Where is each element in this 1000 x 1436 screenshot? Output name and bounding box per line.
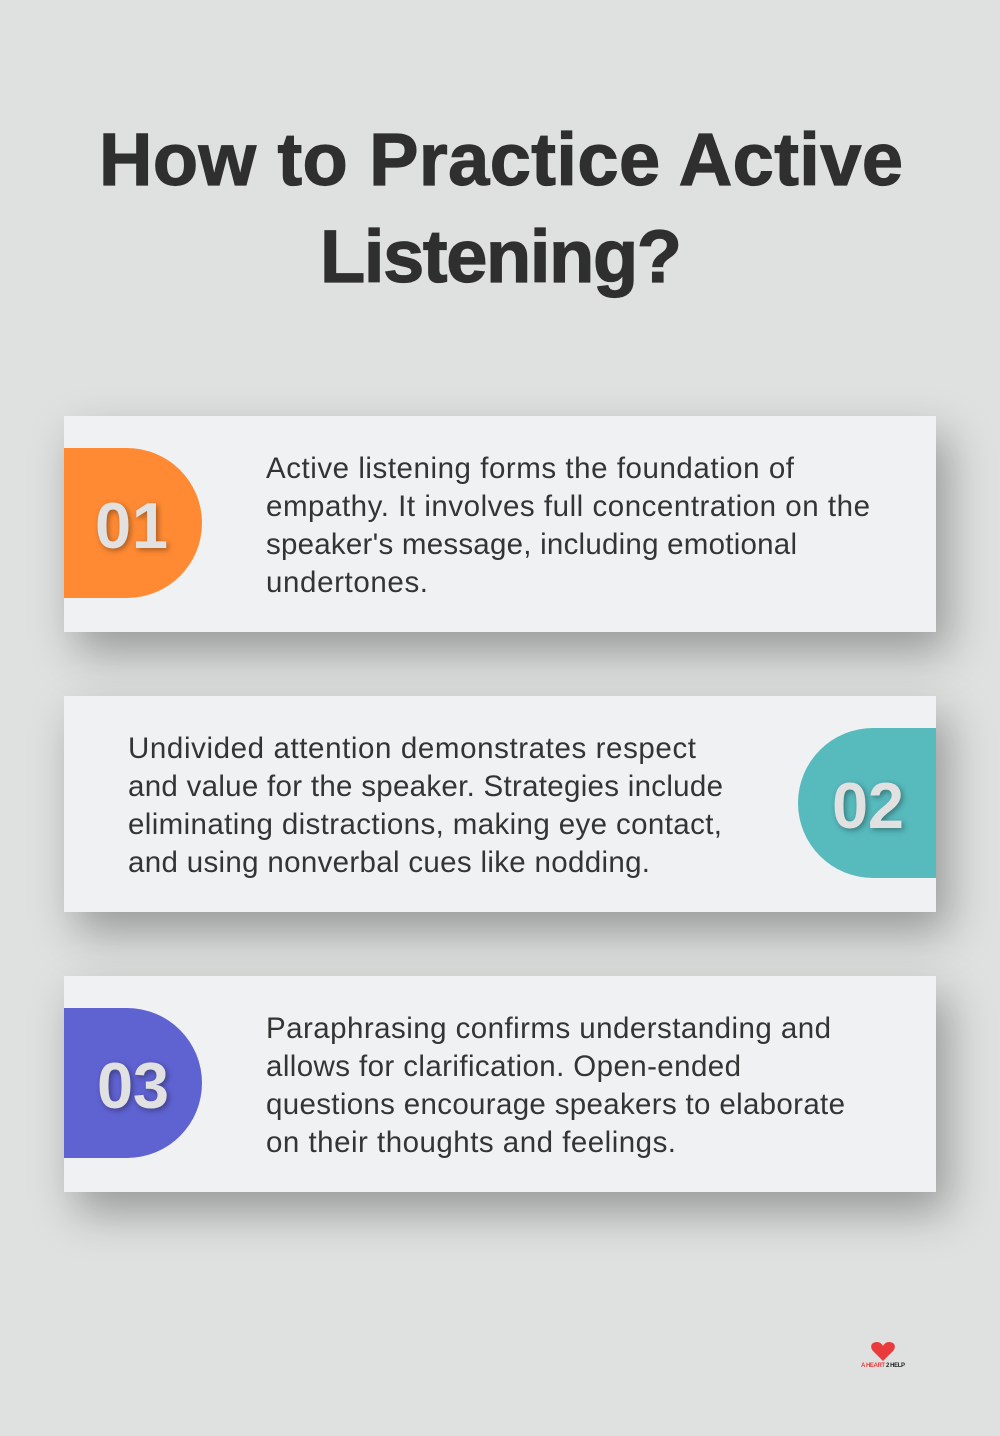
text: step 02 description: and using nonverbal cues like nodding. [128, 846, 650, 879]
title: How to Practice Active [99, 118, 903, 201]
text: step 01 description [266, 452, 870, 599]
text: step 03 description: on their thoughts and feelings. [266, 1126, 676, 1159]
title [99, 118, 903, 298]
logo: A Heart 2 Help: A HEART 2 HELP [861, 1363, 905, 1369]
text: step 01 description: Active listening forms the foundation of [266, 452, 795, 485]
text: step 03 description: Paraphrasing confirms understanding and [266, 1012, 831, 1045]
text: step 01 description: empathy. It involves full concentration on the [266, 490, 870, 523]
logo: A Heart 2 Help [861, 1342, 905, 1369]
badge: 03 [64, 1008, 202, 1158]
icon: heart [871, 1342, 895, 1361]
text: step 01 description: speaker's message, including emotional [266, 528, 797, 561]
text: step 03 description [266, 1012, 845, 1159]
title: Listening? [320, 215, 682, 298]
panel: step 01 [64, 416, 936, 632]
text: step 02 description: and value for the speaker. Strategies include [128, 770, 723, 803]
badge: 02 [798, 728, 936, 878]
panel: step 02 [64, 696, 936, 912]
text: step 01 description: undertones. [266, 566, 428, 599]
panel: step 03 [64, 976, 936, 1192]
text: step 03 description: allows for clarification. Open-ended [266, 1050, 741, 1083]
badge: 01: 01 [95, 489, 168, 562]
text: step 02 description [128, 732, 723, 879]
badge: 02: 02 [832, 769, 904, 842]
text: step 03 description: questions encourage speakers to elaborate [266, 1088, 845, 1121]
text: step 02 description: eliminating distractions, making eye contact, [128, 808, 722, 841]
badge: 01 [64, 448, 202, 598]
text: step 02 description: Undivided attention demonstrates respect [128, 732, 696, 765]
badge: 03: 03 [97, 1049, 169, 1122]
